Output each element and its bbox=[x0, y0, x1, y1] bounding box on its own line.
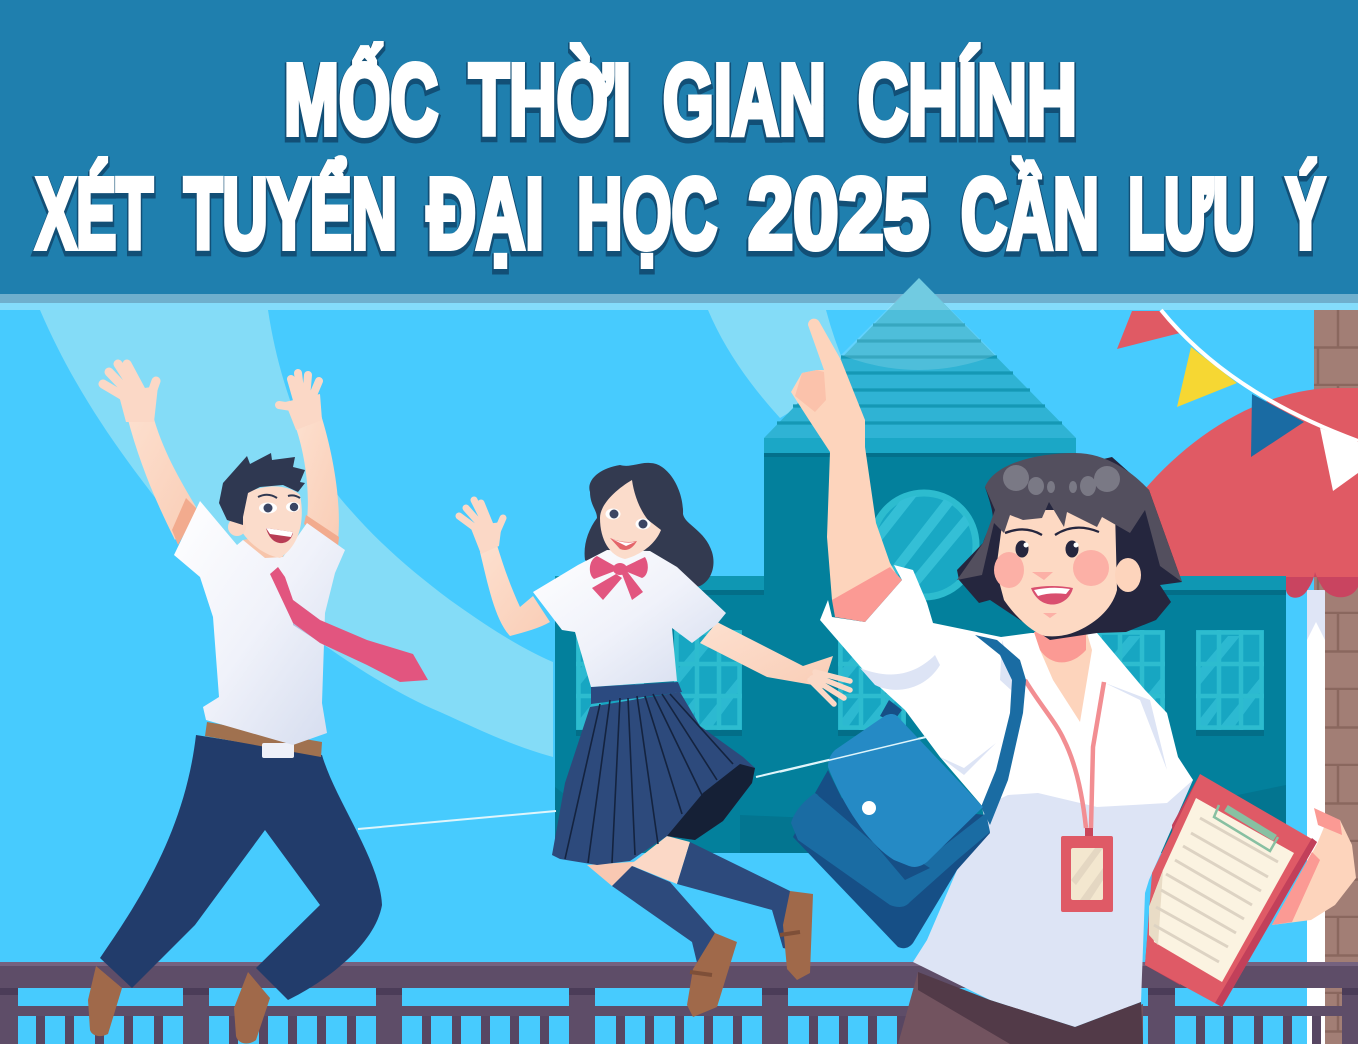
teacher neck and collar bbox=[1034, 630, 1092, 722]
title drop shadow: 2025 bbox=[748, 161, 929, 273]
brick wall bbox=[1314, 310, 1358, 1044]
title drop shadow: MỐC bbox=[284, 47, 438, 159]
teacher shirt lower bbox=[913, 760, 1193, 1027]
boy left arm and hand bbox=[103, 364, 198, 545]
teacher raised arm and pointing hand bbox=[791, 319, 898, 600]
teacher with bag and clipboard bbox=[780, 319, 1356, 1044]
white post bbox=[1307, 590, 1325, 1044]
rope line bbox=[358, 737, 926, 829]
boy legs bbox=[100, 735, 382, 1000]
title white lines bbox=[36, 44, 1325, 270]
girl bow bbox=[590, 556, 648, 600]
title white lines: HỌC bbox=[577, 158, 717, 270]
teacher skirt bbox=[898, 972, 1143, 1044]
title white lines: 2025 bbox=[748, 158, 929, 270]
title banner background bbox=[0, 0, 1358, 310]
teacher lanyard bbox=[1025, 680, 1113, 912]
teacher cuff bbox=[832, 567, 902, 622]
girl student bbox=[459, 463, 850, 1017]
title drop shadow: GIAN bbox=[663, 47, 826, 159]
title drop shadow: XÉT bbox=[36, 161, 153, 273]
title drop shadow bbox=[36, 47, 1325, 273]
school building bbox=[555, 278, 1286, 872]
teacher shirt shadows bbox=[860, 640, 1167, 775]
red awning bbox=[1090, 388, 1358, 598]
title white lines: ĐẠI bbox=[427, 158, 544, 270]
boy belt bbox=[205, 722, 322, 758]
boy right arm and hand bbox=[279, 373, 339, 546]
title drop shadow: THỜI bbox=[469, 47, 631, 159]
girl head bbox=[600, 480, 661, 559]
girl right arm and hand bbox=[700, 622, 850, 704]
title drop shadow: CẦN bbox=[961, 161, 1099, 273]
title drop shadow: LƯU bbox=[1128, 161, 1255, 273]
teacher face bbox=[994, 510, 1141, 636]
boy head bbox=[219, 453, 305, 558]
girl shoes bbox=[687, 891, 813, 1017]
title white lines: GIAN bbox=[663, 44, 826, 156]
title drop shadow: TUYỂN bbox=[184, 161, 397, 273]
girl left arm and hand bbox=[459, 500, 550, 636]
round window bbox=[860, 490, 976, 600]
clipboard bbox=[1145, 774, 1317, 1007]
title white lines: MỐC bbox=[284, 44, 438, 156]
boy shoes bbox=[88, 966, 270, 1043]
teacher hair back bbox=[957, 457, 1182, 640]
title white lines: CHÍNH bbox=[858, 44, 1077, 156]
building walls bbox=[555, 438, 1286, 853]
shoulder bag bbox=[780, 635, 1026, 948]
building windows bbox=[576, 630, 1264, 736]
title white lines: LƯU bbox=[1128, 158, 1255, 270]
title drop shadow: ĐẠI bbox=[427, 161, 544, 273]
bag strap bbox=[975, 635, 1026, 825]
girl hair bbox=[585, 463, 714, 600]
teacher hand holding clipboard bbox=[1272, 808, 1356, 925]
title white lines: XÉT bbox=[36, 158, 153, 270]
background light rays bbox=[40, 310, 846, 757]
boy tie bbox=[270, 567, 428, 682]
title text bbox=[36, 44, 1325, 273]
bunting flags bbox=[1117, 310, 1358, 491]
girl skirt bbox=[552, 682, 755, 865]
title white lines: Ý bbox=[1286, 158, 1325, 270]
boy shirt bbox=[174, 501, 345, 745]
fence bbox=[0, 962, 1358, 1044]
title white lines: TUYỂN bbox=[184, 158, 397, 270]
boy student bbox=[88, 364, 428, 1043]
teacher hair fringe bbox=[957, 453, 1182, 582]
title white lines: CẦN bbox=[961, 158, 1099, 270]
teacher shirt upper bbox=[820, 565, 1193, 807]
title white lines: THỜI bbox=[469, 44, 631, 156]
girl legs and socks bbox=[587, 836, 792, 967]
title drop shadow: Ý bbox=[1286, 161, 1325, 273]
title drop shadow: CHÍNH bbox=[858, 47, 1077, 159]
girl blouse bbox=[533, 550, 726, 687]
roof bbox=[764, 278, 1076, 456]
title drop shadow: HỌC bbox=[577, 161, 717, 273]
